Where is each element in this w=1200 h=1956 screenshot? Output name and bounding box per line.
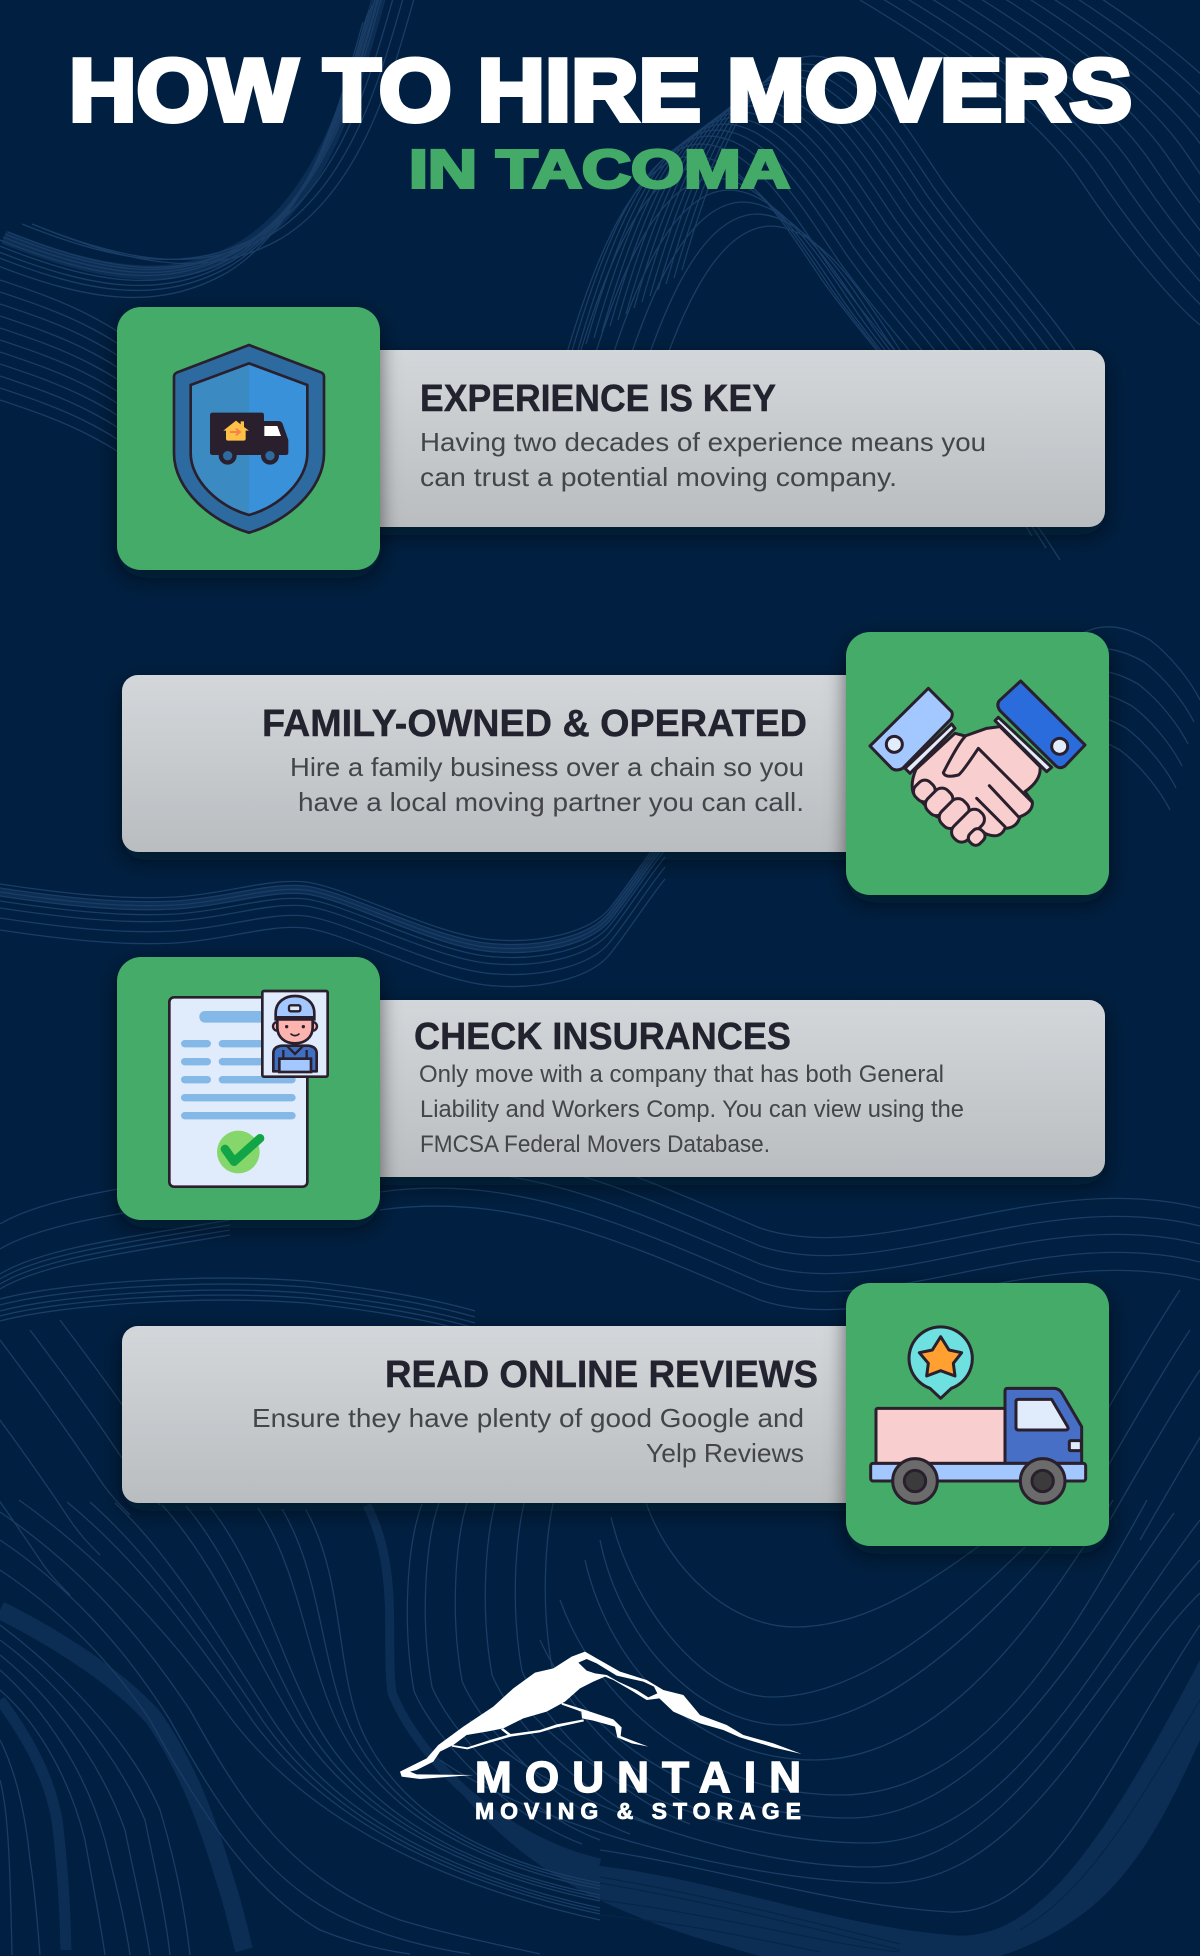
body text: can trust a potential moving company. (420, 462, 897, 492)
icon tile (846, 632, 1109, 895)
text bar (340, 1000, 1105, 1177)
body text (419, 1061, 964, 1158)
body text: Having two decades of experience means you (420, 427, 986, 457)
body text: Ensure they have plenty of good Google and (252, 1403, 804, 1433)
heading: READ ONLINE REVIEWS (385, 1354, 818, 1396)
icon: mountain (400, 1652, 802, 1779)
logo: Mountain Moving & Storage (400, 1652, 802, 1824)
icon tile (117, 957, 380, 1220)
body text: Hire a family business over a chain so you (290, 752, 804, 782)
panel: read online reviews (122, 1283, 1109, 1546)
title: HOW TO HIRE MOVERS (69, 40, 1132, 140)
body text: Only move with a company that has both General (419, 1061, 944, 1088)
text bar (340, 350, 1105, 527)
text bar (122, 675, 887, 852)
body text: Liability and Workers Comp. You can view using the (420, 1096, 964, 1123)
body text (252, 1403, 804, 1468)
icon: shield with truck (174, 345, 324, 533)
logo tagline: MOVING & STORAGE (475, 1798, 801, 1824)
body text: FMCSA Federal Movers Database. (420, 1131, 770, 1158)
body text: have a local moving partner you can call. (298, 787, 804, 817)
icon tile (846, 1283, 1109, 1546)
subtitle: IN TACOMA (409, 140, 790, 200)
title (69, 40, 1132, 200)
body text (420, 427, 986, 492)
icon: insurance document with mover (169, 991, 328, 1187)
icon tile (117, 307, 380, 570)
heading: EXPERIENCE IS KEY (420, 378, 776, 420)
logo wordmark: MOUNTAIN (475, 1753, 801, 1802)
panel: family-owned and operated (122, 632, 1109, 895)
heading: CHECK INSURANCES (414, 1016, 791, 1058)
panel: check insurances (117, 957, 1105, 1220)
icon: truck with star rating (871, 1327, 1086, 1503)
icon: handshake (870, 681, 1085, 848)
body text (290, 752, 804, 817)
text bar (122, 1326, 887, 1503)
body text: Yelp Reviews (646, 1438, 804, 1468)
panel: experience is key (117, 307, 1105, 570)
heading: FAMILY-OWNED & OPERATED (262, 703, 807, 745)
